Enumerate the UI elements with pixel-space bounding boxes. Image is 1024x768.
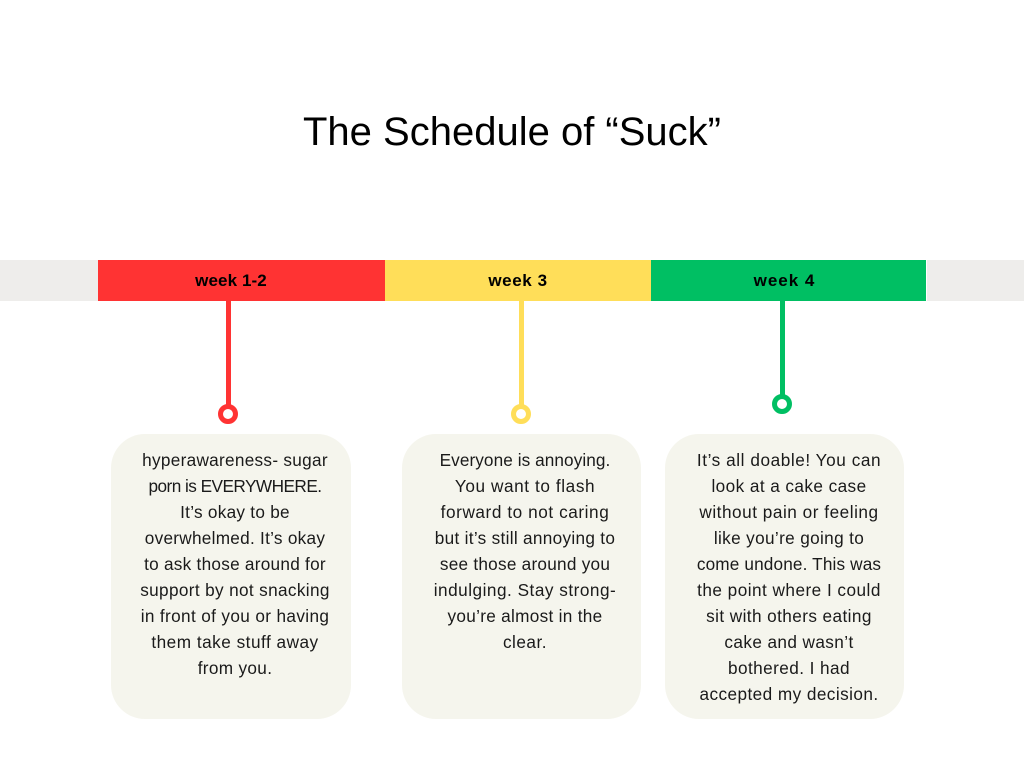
panel: week 1-2 text: in front of you or having bbox=[141, 606, 329, 626]
panel: week 3 text: indulging. Stay strong- bbox=[434, 580, 616, 600]
panel: week 4 text: like you’re going to bbox=[714, 528, 864, 548]
panel: week 4 text: look at a cake case bbox=[711, 476, 867, 496]
panel: week 1-2 text: overwhelmed. It’s okay bbox=[145, 528, 325, 548]
panel: week 4 text: accepted my decision. bbox=[699, 684, 879, 704]
timeline band bbox=[0, 260, 1024, 301]
connector: week 1-2 bbox=[218, 301, 238, 424]
panel: week 3 text: clear. bbox=[503, 632, 547, 652]
panel: week 1-2 text: from you. bbox=[198, 658, 272, 678]
panel: week 4 text: It’s all doable! You can bbox=[697, 450, 881, 470]
segment: week 4 bbox=[651, 260, 927, 301]
panel: week 3 text: but it’s still annoying to bbox=[435, 528, 615, 548]
panel: week 3 text: you’re almost in the bbox=[447, 606, 603, 626]
panel: week 1-2 text: hyperawareness- sugar bbox=[142, 450, 328, 470]
segment: week 4: week 4 bbox=[754, 271, 815, 290]
panel: week 1-2 text: to ask those around for bbox=[144, 554, 326, 574]
panel: week 4 text: without pain or feeling bbox=[699, 502, 879, 522]
panel: week 1-2 text: support by not snacking bbox=[140, 580, 330, 600]
connector: week 4 bbox=[772, 301, 792, 414]
segment: week 3 bbox=[385, 260, 651, 301]
panel: week 1-2 text bbox=[111, 434, 351, 719]
panel: week 4 text: sit with others eating bbox=[706, 606, 872, 626]
panel: week 3 text: forward to not caring bbox=[441, 502, 609, 522]
connector: week 3 bbox=[511, 301, 531, 424]
panel: week 1-2 text: porn is EVERYWHERE. bbox=[148, 476, 322, 496]
segment: week 3: week 3 bbox=[488, 271, 548, 290]
panel: week 3 text bbox=[402, 434, 641, 719]
segment: week 1-2: week 1-2 bbox=[195, 271, 267, 290]
panel: week 4 text: bothered. I had bbox=[728, 658, 850, 678]
panel: week 3 text: You want to flash bbox=[455, 476, 595, 496]
panel: week 1-2 text: them take stuff away bbox=[151, 632, 319, 652]
panel: week 1-2 text: It’s okay to be bbox=[180, 502, 290, 522]
title: The Schedule of “Suck” bbox=[303, 110, 721, 154]
panel: week 4 text bbox=[665, 434, 904, 719]
segment: week 1-2 bbox=[98, 260, 385, 301]
panel: week 3 text: Everyone is annoying. bbox=[440, 450, 610, 470]
panel: week 4 text: the point where I could bbox=[697, 580, 881, 600]
panel: week 3 text: see those around you bbox=[440, 554, 610, 574]
panel: week 4 text: cake and wasn’t bbox=[724, 632, 854, 652]
panel: week 4 text: come undone. This was bbox=[697, 554, 881, 574]
